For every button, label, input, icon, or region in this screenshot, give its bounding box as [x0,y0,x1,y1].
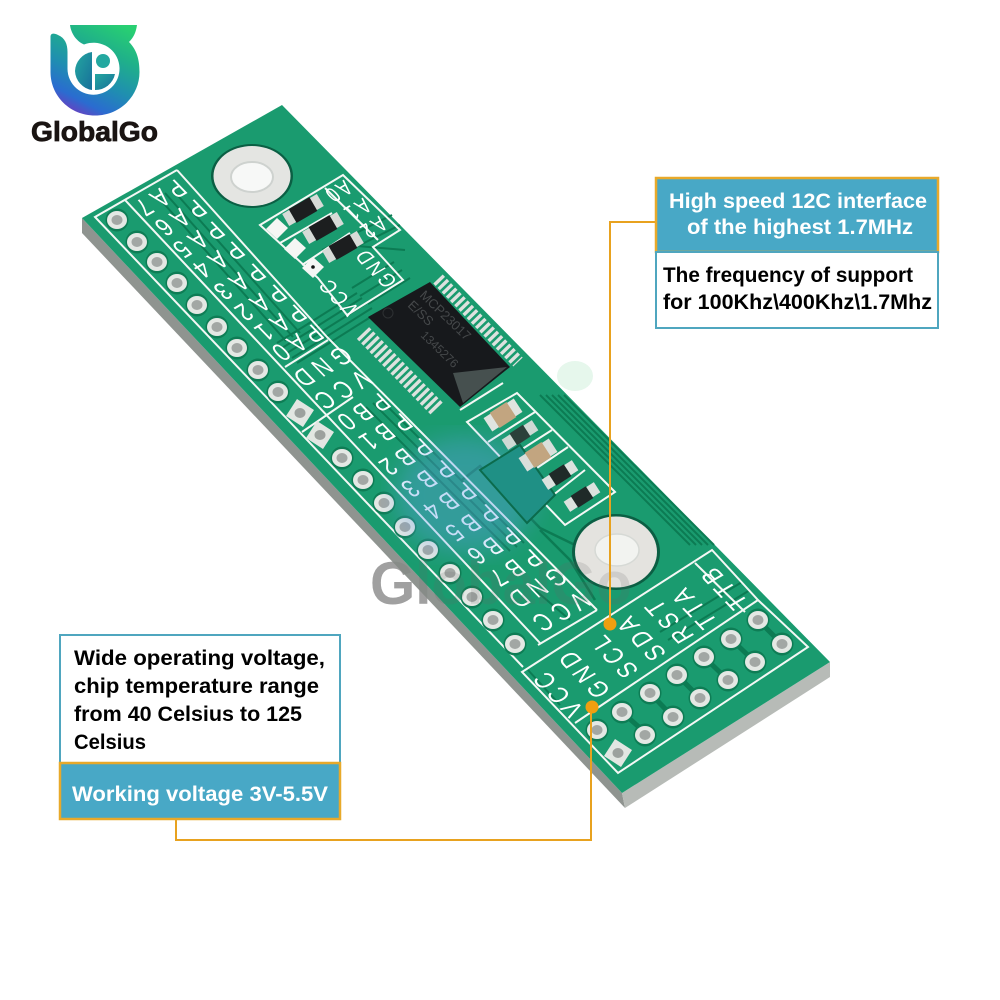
SMD components right [483,398,601,513]
pin labels left: GND [281,340,358,394]
copper traces [158,189,782,728]
callout body: for 100Khz\400Khz\1.7Mhz [663,291,932,314]
MCP23017 chip: 1345276 [418,328,461,371]
board side edge [82,218,625,808]
pin labels left: PB3 [389,454,460,505]
board surface [82,105,830,793]
solder pads bottom header [586,608,794,767]
address resistors [282,193,364,264]
callout: working voltage [60,635,340,819]
pin labels left: PB7 [477,543,548,594]
pin labels left: PB6 [455,521,526,572]
address labels: A2 [352,212,392,243]
pin labels left: PA1 [243,299,312,348]
PCB board [82,105,830,808]
connector: top callout [604,222,655,630]
callout body: chip temperature range [74,675,319,698]
callout heading: High speed 12C interface [669,190,927,213]
address jumper pads [266,218,324,278]
pin labels left: PA7 [123,174,192,223]
pin labels left: PA6 [143,194,212,243]
callout body: The frequency of support [663,264,913,287]
callout body [60,635,340,763]
pin labels bottom [524,560,755,721]
pin labels bottom: GND [550,643,617,702]
mounting hole top [211,144,293,208]
address labels: GND [349,244,403,291]
address labels [313,176,403,319]
pin labels left: VCC [302,364,377,417]
callout body: from 40 Celsius to 125 [74,703,302,726]
pin labels left: PB4 [411,476,482,527]
pin labels bottom: TTA [663,580,724,633]
pin labels bottom: SCL [582,627,645,682]
callout heading [60,763,340,819]
board bottom edge [622,662,830,808]
callout body: Celsius [74,731,146,754]
pin labels left [123,174,595,639]
callout heading [656,178,938,252]
copper pour [480,445,555,523]
pin labels left: PA3 [202,258,271,307]
pin labels left: PB5 [433,498,504,549]
address labels: A1 [336,194,376,225]
pin labels left: PB0 [325,387,396,438]
callout body [656,252,938,328]
callout heading: of the highest 1.7MHz [687,216,913,239]
MCP23017 chip [363,279,518,410]
watermark tint [395,437,535,553]
watermark text on white: GlobalGo [370,550,632,617]
pin labels left: PA0 [260,319,329,368]
pin labels left: GND [496,561,573,615]
MCP23017 chip: MCP23017 [417,287,474,343]
logo: GlobalGo [31,25,158,147]
solder pads left row [106,208,526,656]
mounting hole bottom [572,514,660,590]
pin labels bottom: RST [636,592,701,648]
silkscreen lines [95,170,808,773]
pin labels left: PB1 [347,407,418,458]
pin labels left: PA5 [161,216,230,265]
address labels: A0 [317,176,357,207]
pin labels bottom: SDA [608,608,673,665]
connector: bottom callout [176,700,598,840]
watermark logo glimpse on white [557,361,593,391]
callout heading: Working voltage 3V-5.5V [72,783,328,806]
watermark text over board: GlobalGo [370,550,632,617]
pin labels left: PB2 [367,432,438,483]
MCP23017 chip: E/SS [405,297,437,329]
pin labels bottom: TTB [692,560,755,614]
pin labels bottom: VCC [524,664,591,721]
pin labels left: PA2 [223,279,292,328]
callout: I2C interface [656,178,938,328]
address labels: VCC [313,274,365,319]
pin labels left: VCC [520,586,595,639]
logo: GlobalGo: GlobalGo [31,116,158,147]
pin labels left: PA4 [181,236,250,285]
callout body: Wide operating voltage, [74,647,325,670]
